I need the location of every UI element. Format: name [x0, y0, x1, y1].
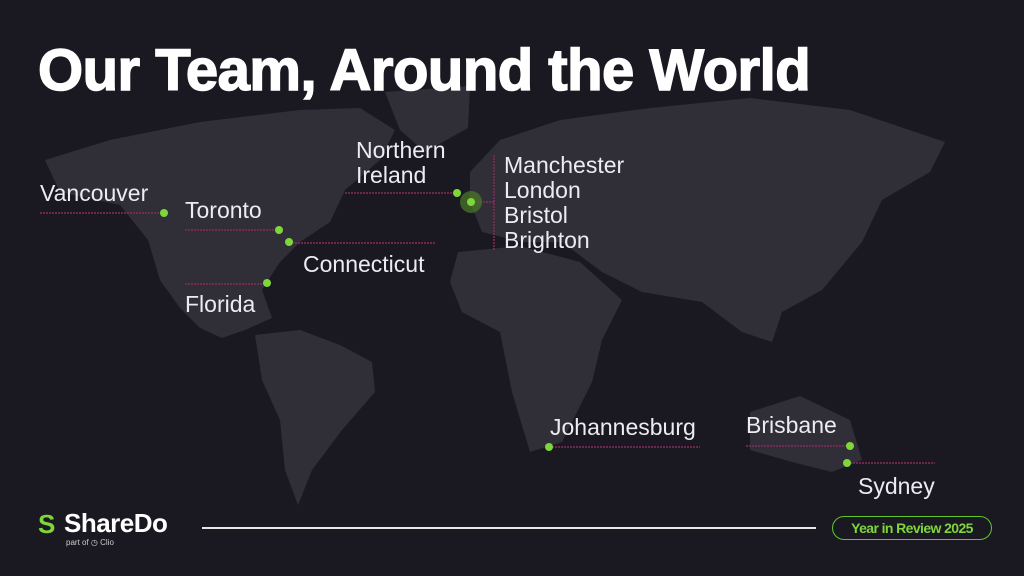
label: Northern Ireland: Ireland — [356, 162, 426, 188]
divider line — [202, 527, 816, 529]
map: south america — [255, 330, 375, 505]
label: Brisbane: Brisbane — [746, 412, 837, 438]
label: UK cities: Bristol — [504, 202, 568, 228]
label: UK cities — [504, 152, 624, 253]
logo: ShareDo: ShareDo — [64, 508, 167, 538]
label: Vancouver: Vancouver — [40, 180, 148, 206]
map: africa — [450, 246, 622, 452]
label: UK cities: Manchester — [504, 152, 624, 178]
label: UK cities: Brighton — [504, 227, 590, 253]
label: Toronto: Toronto — [185, 197, 262, 223]
badge: Year in Review 2025: Year in Review 2025 — [851, 520, 973, 536]
logo: ShareDo: S — [38, 509, 55, 539]
label: Johannesburg: Johannesburg — [550, 414, 696, 440]
badge: Year in Review 2025 — [832, 516, 992, 540]
map: australia — [750, 396, 862, 472]
logo: ShareDo — [38, 508, 167, 547]
label: Florida: Florida — [185, 291, 255, 317]
label: Northern Ireland — [356, 137, 445, 188]
label: Sydney: Sydney — [858, 473, 935, 499]
label: Connecticut: Connecticut — [303, 251, 424, 277]
label: Northern Ireland: Northern — [356, 137, 445, 163]
logo: ShareDo: part of ◷ Clio — [66, 538, 114, 547]
map: north america — [45, 108, 395, 338]
title: Our Team, Around the World — [38, 38, 810, 103]
map: eurasia — [470, 98, 945, 342]
map: greenland — [385, 86, 470, 152]
label: UK cities: London — [504, 177, 581, 203]
